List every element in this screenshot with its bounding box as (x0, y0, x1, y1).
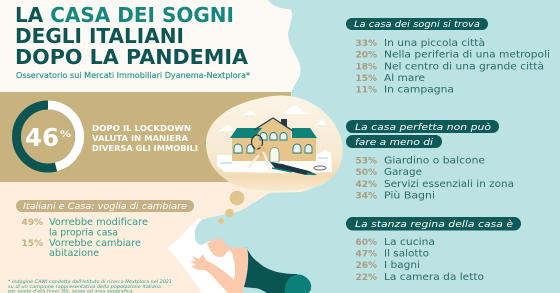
panel: la casa dei sogni si trova: In una piccola città (384, 38, 485, 49)
heading pill (346, 217, 521, 230)
panel: voglia di cambiare: la propria casa (49, 228, 118, 238)
panel: la stanza regina: Il salotto (384, 248, 429, 260)
panel: la stanza regina: La cucina (384, 237, 435, 248)
panel: la stanza regina: La stanza regina della casa è (355, 219, 514, 230)
panel: la stanza regina: 26% (355, 261, 377, 271)
body (243, 247, 300, 293)
panel: la stanza regina: La camera da letto (384, 272, 484, 283)
panel: la casa dei sogni si trova: Nel centro di una grande città (384, 62, 544, 72)
heading pills: La casa perfetta non può (355, 122, 492, 133)
panel: la casa dei sogni si trova: Nella periferia di una metropoli (384, 50, 550, 60)
title line 2: DEGLI ITALIANI (15, 24, 184, 48)
panel: la casa dei sogni si trova: 15% (355, 74, 377, 84)
clouds (218, 106, 328, 131)
house walls (232, 119, 316, 161)
panel: voglia di cambiare: Italiani e Casa: voglia di cambiare (23, 202, 187, 212)
lockdown statement: DOPO IL LOCKDOWN (92, 124, 191, 133)
title line 3: DOPO LA PANDEMIA (15, 45, 249, 69)
background: teal hair wave (195, 0, 560, 293)
heading pill (16, 200, 194, 212)
footnote: * indagine CAWI condotta dall'Istituto di ricerca Nextplora nel 2021 (8, 279, 172, 284)
panel: la casa perfetta: Giardino o balcone (384, 156, 485, 166)
pillow (167, 218, 240, 293)
panel: la casa perfetta: 34% (355, 192, 377, 202)
donut chart 46% (16, 105, 80, 168)
panel: la casa dei sogni si trova: In campagna (384, 84, 454, 96)
arm and face (190, 238, 248, 293)
panel: la casa dei sogni si trova: Al mare (384, 73, 425, 84)
panel: la stanza regina (346, 217, 521, 283)
panel: la casa dei sogni si trova: La casa dei sogni si trova (354, 20, 480, 30)
panel: voglia di cambiare: 49% (21, 218, 43, 228)
panel: la stanza regina: 60% (355, 238, 377, 248)
panel: la casa dei sogni si trova: 11% (355, 86, 377, 96)
panel: voglia di cambiare (16, 200, 194, 259)
roofs (230, 128, 317, 138)
thought bubble with house (206, 95, 343, 191)
thought dots (218, 191, 244, 224)
heading pill (346, 18, 488, 30)
panel: la casa perfetta: 50% (355, 168, 377, 178)
panel: la casa dei sogni si trova: 18% (355, 62, 377, 72)
panel: voglia di cambiare: Vorrebbe modificare (49, 217, 148, 228)
panel: la casa perfetta: Più Bagni (384, 190, 435, 202)
blueprint (217, 150, 332, 173)
value: 46 (25, 123, 59, 152)
hip (285, 274, 311, 293)
tan band (0, 92, 291, 182)
lockdown statement (92, 124, 198, 153)
panel: voglia di cambiare: 15% (21, 239, 43, 249)
subtitle: Osservatorio sui Mercati Immobiliari Dyanema-Nextplora* (16, 71, 250, 80)
title (15, 3, 249, 69)
panel: la casa perfetta: Garage (384, 167, 422, 178)
chimney (281, 119, 287, 128)
panel: la casa dei sogni si trova: 20% (355, 50, 377, 60)
panel: voglia di cambiare: Vorrebbe cambiare (49, 238, 141, 249)
panel: la casa perfetta (346, 120, 514, 202)
lockdown statement: DIVERSA GLI IMMOBILI (92, 144, 198, 153)
heading pills (346, 120, 499, 148)
hair over pillow (195, 214, 262, 247)
panel: la casa dei sogni si trova: 33% (355, 39, 377, 49)
lockdown statement: VALUTA IN MANIERA (92, 134, 188, 143)
windows (234, 132, 312, 153)
footnote: su di un campione rappresentativo della popolazione italiana (8, 284, 162, 289)
heading pills: fare a meno di (355, 138, 434, 148)
background: top cream (0, 0, 302, 94)
bubble (206, 95, 343, 191)
donut chart 46%: % (60, 130, 71, 140)
panel: la casa perfetta: Servizi essenziali in zona (384, 179, 514, 190)
panel: voglia di cambiare: abitazione (49, 248, 99, 259)
panel: la casa perfetta: 42% (355, 180, 377, 190)
keys (248, 135, 270, 170)
pen (270, 162, 317, 175)
panel: la stanza regina: I bagni (384, 260, 420, 271)
door (270, 148, 279, 162)
panel: la stanza regina: 47% (355, 250, 377, 260)
footnote (7, 279, 172, 293)
title line 1: LA CASA DEI SOGNI (15, 3, 234, 27)
panel: la stanza regina: 22% (355, 273, 377, 283)
panel: la casa perfetta: 53% (355, 156, 377, 166)
panel: la casa dei sogni si trova (346, 18, 550, 96)
sleeping woman illustration (167, 214, 311, 293)
